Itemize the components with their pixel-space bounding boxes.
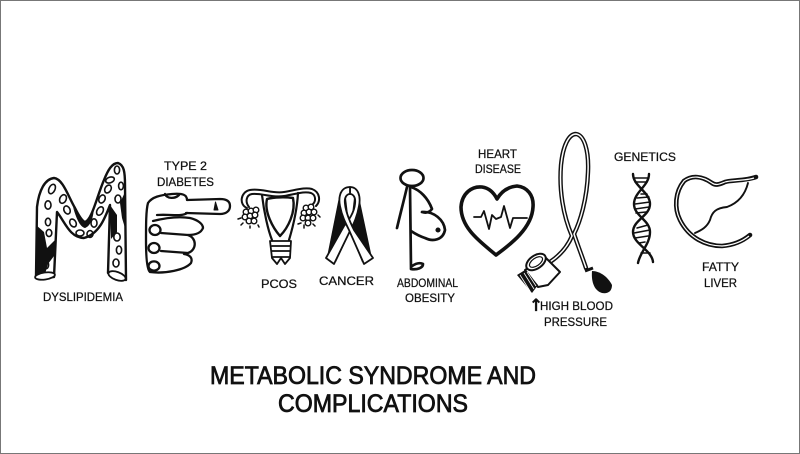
label: heart disease xyxy=(475,147,521,176)
label: fatty liver: FATTY xyxy=(702,260,739,274)
label: type 2 diabetes: DIABETES xyxy=(157,175,214,189)
letter T: uterus, PCOS xyxy=(238,188,320,264)
label: cancer: CANCER xyxy=(319,274,374,288)
label: fatty liver: LIVER xyxy=(704,276,737,290)
label: heart disease: DISEASE xyxy=(475,162,521,176)
label: high blood pressure: HIGH BLOOD xyxy=(540,299,613,313)
letter A: awareness ribbon, cancer xyxy=(326,187,373,264)
label: high blood pressure: ↑ xyxy=(529,296,543,316)
label: genetics: GENETICS xyxy=(614,150,676,164)
title: METABOLIC SYNDROME AND xyxy=(210,362,536,390)
label: abdominal obesity: OBESITY xyxy=(405,291,455,305)
title xyxy=(210,362,536,418)
letter B: figure with large belly, abdominal obesity xyxy=(397,170,445,269)
letter L: blood pressure cuff and tube xyxy=(517,134,612,293)
letter O: heart with ECG trace, heart disease xyxy=(461,186,533,255)
label: type 2 diabetes xyxy=(157,159,214,189)
label: PCOS: PCOS xyxy=(261,277,297,291)
label: type 2 diabetes: TYPE 2 xyxy=(164,159,207,173)
letter E: pointing hand, type 2 diabetes xyxy=(146,194,230,273)
letter M: artery, dyslipidemia xyxy=(35,163,127,283)
letter C: liver, fatty liver xyxy=(676,177,756,246)
label: abdominal obesity: ABDOMINAL xyxy=(397,276,458,290)
label: fatty liver xyxy=(702,260,739,290)
title: COMPLICATIONS xyxy=(278,390,468,418)
label: abdominal obesity xyxy=(397,276,458,305)
label: heart disease: HEART xyxy=(478,147,518,161)
label: dyslipidemia: DYSLIPIDEMIA xyxy=(43,290,123,304)
label: high blood pressure xyxy=(529,296,613,329)
letter I: DNA helix, genetics xyxy=(633,174,653,263)
label: high blood pressure: PRESSURE xyxy=(544,315,607,329)
